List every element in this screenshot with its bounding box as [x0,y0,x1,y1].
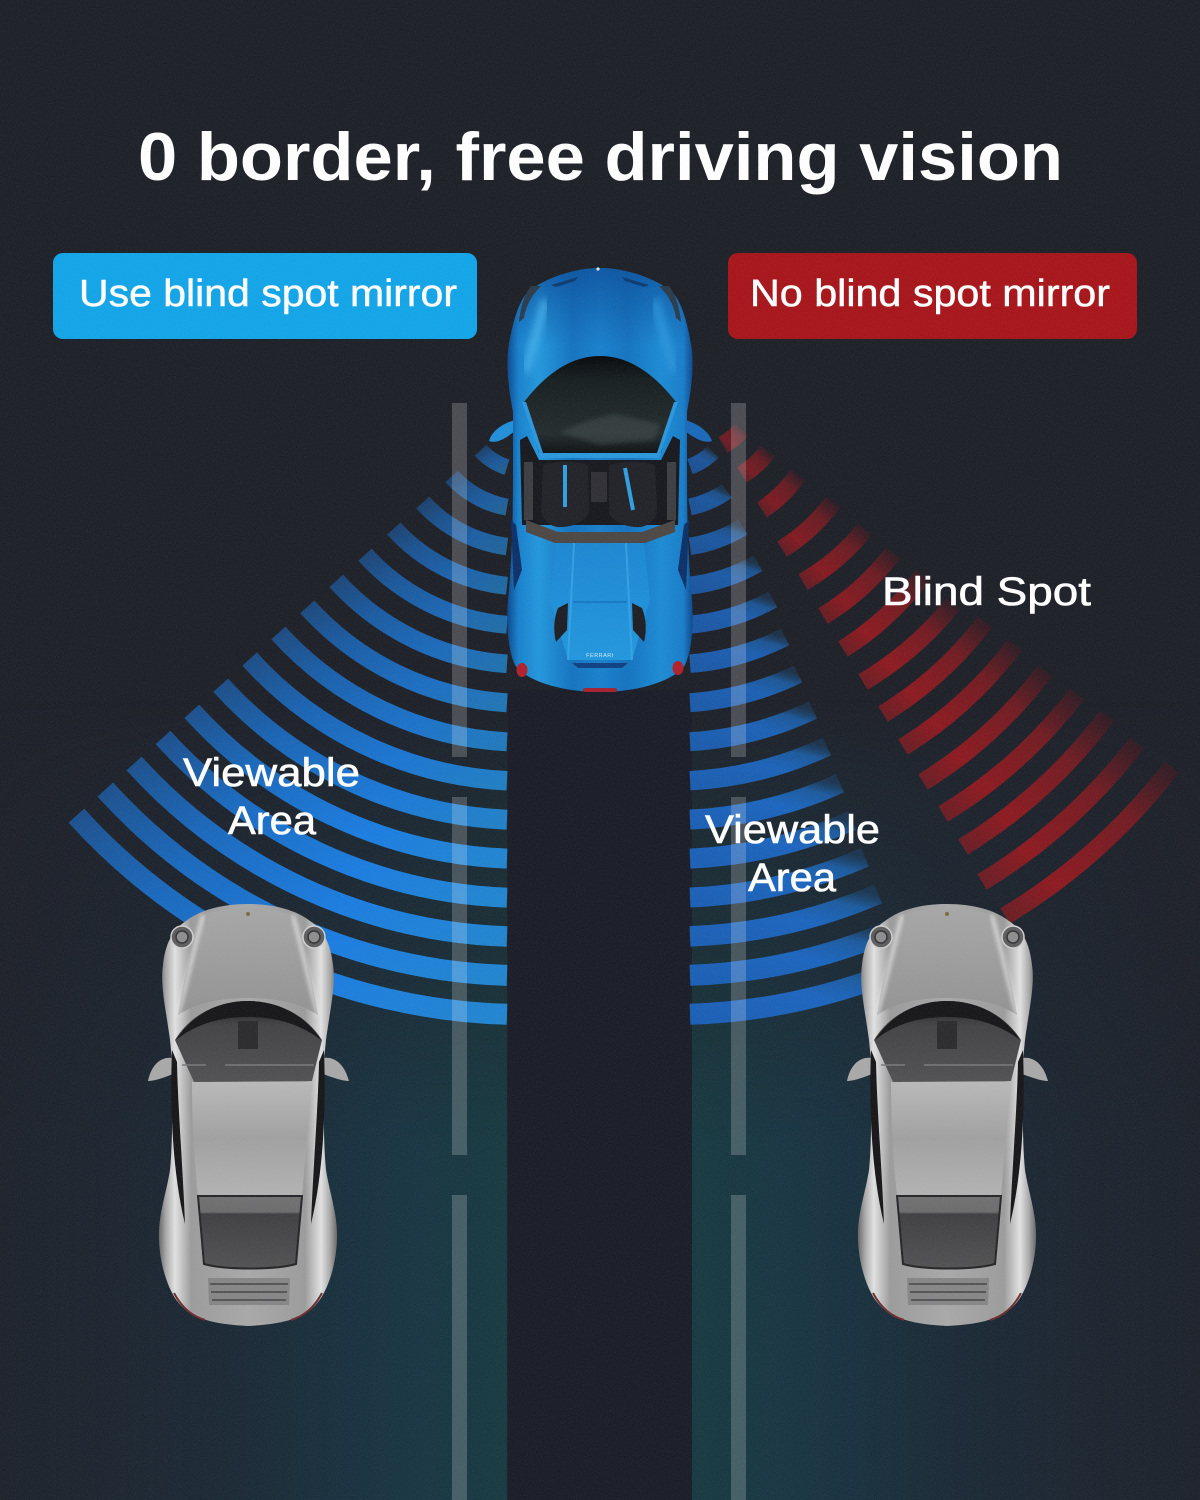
car body [507,268,693,692]
carbon bar [526,520,675,543]
right silver car [847,904,1048,1326]
label: right viewable area: Viewable [705,808,880,852]
label: left viewable area [183,751,360,843]
right mirror [685,420,712,442]
badge: no blind spot mirror: No blind spot mirror [750,273,1110,315]
label: left viewable area: Area [228,799,317,843]
badge lettering: FERRARI [586,653,614,659]
seats [541,462,589,527]
red blind spot arcs [723,429,1172,916]
badge: use blind spot mirror: Use blind spot mirror [79,273,457,315]
lane markings [452,403,746,1500]
rear deck [550,543,650,660]
label: blind spot: Blind Spot [882,570,1091,614]
blue car [489,267,712,692]
side shadows [511,520,522,590]
headlights and vents [519,286,541,322]
title: 0 border, free driving vision [138,119,1063,195]
left viewable area arcs [76,450,507,1014]
left silver car [148,904,349,1326]
label: right viewable area [705,808,880,900]
windscreen [524,356,676,453]
hood highlights [526,300,545,372]
badge: no blind spot mirror [728,253,1137,339]
label: left viewable area: Viewable [183,751,360,795]
right viewable area arcs [690,452,900,1014]
central road strip [508,690,692,1500]
badge: use blind spot mirror [53,253,477,339]
road teal glow [102,797,1097,1500]
cockpit [520,436,680,525]
label: right viewable area: Area [748,856,837,900]
tail lights [516,663,528,677]
left mirror [489,420,515,442]
